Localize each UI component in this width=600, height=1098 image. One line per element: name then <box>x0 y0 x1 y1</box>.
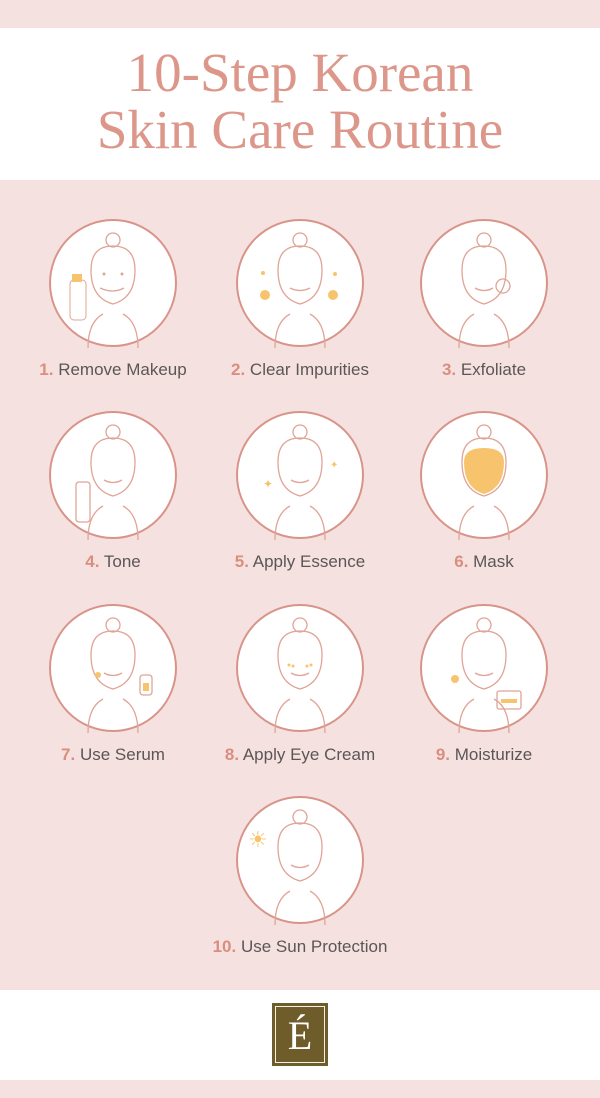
icon: apply eye cream <box>236 604 364 733</box>
step 2 <box>231 219 369 379</box>
title: Skin Care Routine <box>97 99 503 160</box>
title <box>97 42 503 160</box>
step 1: 1. Remove Makeup <box>39 360 187 379</box>
step 1 <box>39 219 187 379</box>
step 3 <box>420 219 548 379</box>
icon: apply essence: ✦ <box>330 460 338 471</box>
icon: remove makeup <box>49 219 177 348</box>
step 10: 10. Use Sun Protection <box>213 937 387 956</box>
step 3: 3. Exfoliate <box>442 360 526 379</box>
icon: use serum <box>49 604 177 733</box>
icon: sun protection <box>236 796 364 925</box>
step 9 <box>420 604 548 764</box>
icon: apply essence: ✦ <box>263 477 273 491</box>
step 4 <box>49 411 177 571</box>
step 5: 5. Apply Essence <box>235 552 365 571</box>
icon: mask <box>420 411 548 540</box>
step 8: 8. Apply Eye Cream <box>225 745 375 764</box>
step 8 <box>225 604 375 764</box>
step 2: 2. Clear Impurities <box>231 360 369 379</box>
step 4: 4. Tone <box>85 552 141 571</box>
icon: tone <box>49 411 177 540</box>
logo <box>272 1003 328 1066</box>
step 7: 7. Use Serum <box>61 745 165 764</box>
step 10 <box>213 796 387 956</box>
title: 10-Step Korean <box>127 42 473 103</box>
step 7 <box>49 604 177 764</box>
step 6 <box>420 411 548 571</box>
icon: exfoliate <box>420 219 548 348</box>
icon: sun protection: ☀ <box>248 827 268 852</box>
icon: moisturize <box>420 604 548 733</box>
step 9: 9. Moisturize <box>436 745 532 764</box>
logo: É <box>288 1013 312 1058</box>
step 5 <box>235 411 365 571</box>
step 6: 6. Mask <box>454 552 514 571</box>
icon: clear impurities <box>236 219 364 348</box>
icon: apply essence <box>236 411 364 540</box>
